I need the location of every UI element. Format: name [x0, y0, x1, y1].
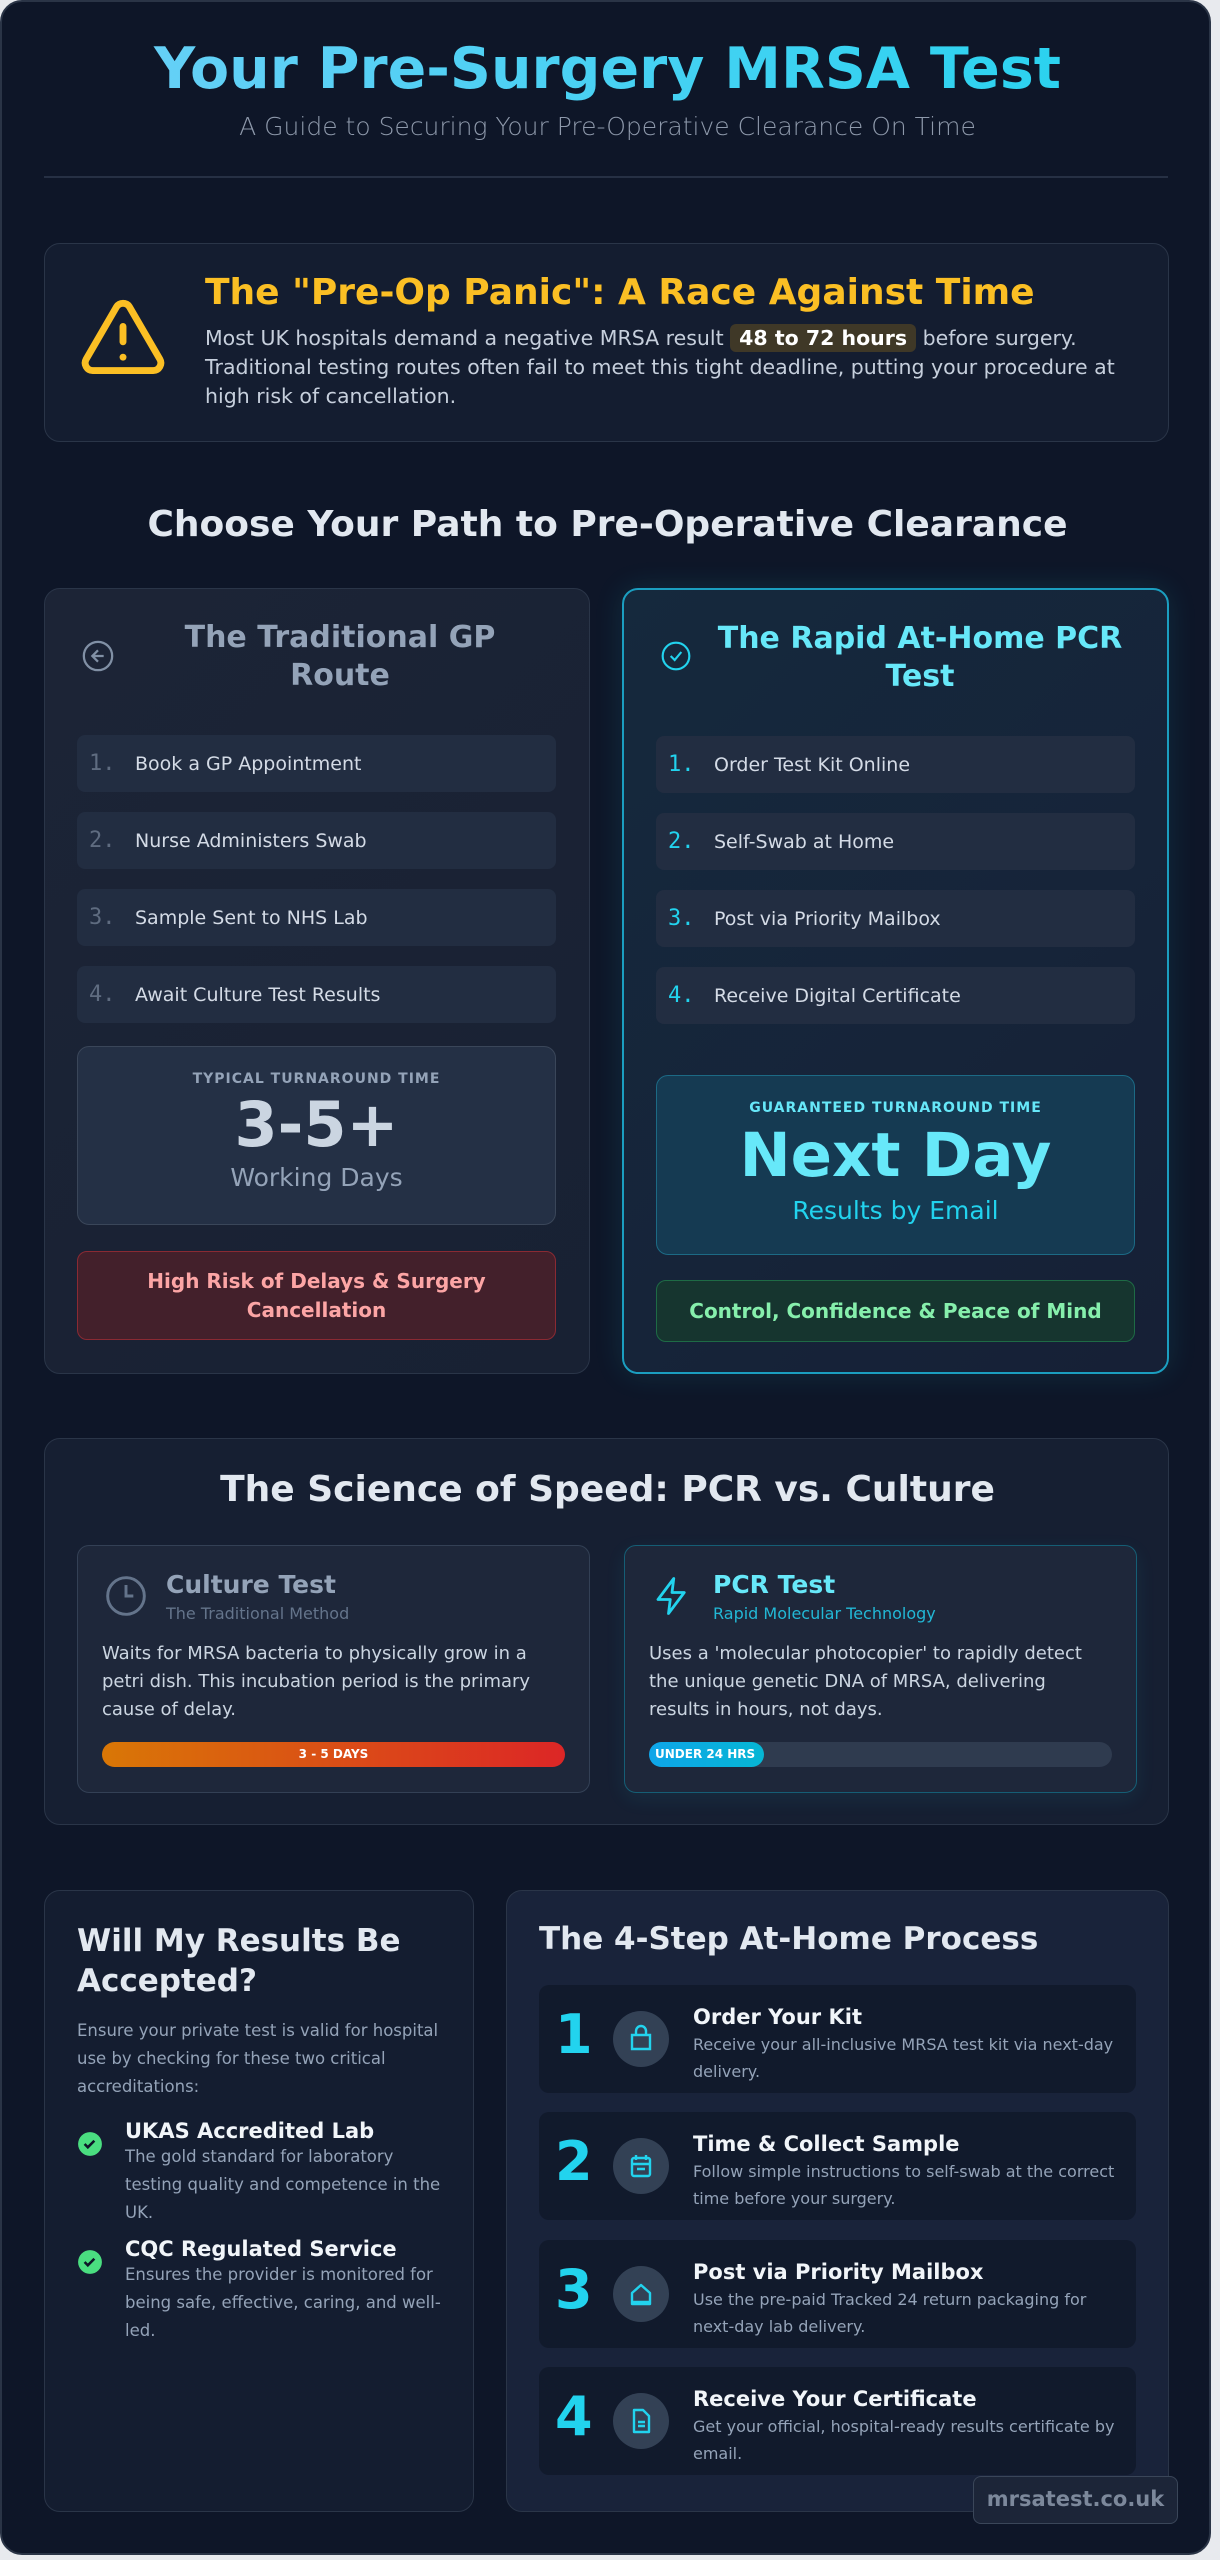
- text: panic body: Most UK hospitals demand a negative MRSA result 48 to 72 hours before surgery. Traditional testing routes often fail to meet this tight deadline, putting your procedure at high risk of cancellation.: [205, 326, 1115, 408]
- card: PCR test: [624, 1545, 1137, 1793]
- stat: next day: [656, 1075, 1135, 1255]
- item: CQC: CQC Regulated Service: [125, 2237, 397, 2261]
- step 1: Receive your all-inclusive MRSA test kit via next-day delivery.: [693, 2035, 1113, 2081]
- icon: clock: [106, 1576, 146, 1616]
- watermark: [973, 2476, 1178, 2524]
- steps list: [77, 735, 556, 1023]
- panel: accreditation: [44, 1890, 474, 2512]
- heading: Will My Results Be Accepted?: [77, 1923, 400, 1999]
- step 1: Order Your Kit: [693, 2005, 862, 2029]
- steps list: Self-Swab at Home: [714, 830, 894, 852]
- steps list: Post via Priority Mailbox: [714, 908, 941, 930]
- steps list: Book a GP Appointment: [135, 752, 361, 774]
- steps list: 1.: [668, 752, 694, 777]
- step 4: Receive Your Certificate: [693, 2387, 977, 2411]
- card: PCR test: PCR Test: [713, 1570, 835, 1599]
- step 4: Get your official, hospital-ready results certificate by email.: [693, 2417, 1114, 2463]
- step 3: Use the pre-paid Tracked 24 return packaging for next-day lab delivery.: [693, 2290, 1086, 2336]
- icon: check circle: [662, 642, 690, 670]
- step 3: [539, 2240, 1136, 2348]
- panel: pre-op panic: [44, 243, 1169, 442]
- heading: choose path: Choose Your Path to Pre-Operative Clearance: [147, 504, 1068, 545]
- intro text: Ensure your private test is valid for hospital use by checking for these two critical accreditations:: [77, 2021, 438, 2096]
- callout: high risk: High Risk of Delays & Surgery: [147, 1269, 486, 1293]
- stat: 3-5+ days: TYPICAL TURNAROUND TIME: [193, 1071, 440, 1087]
- heading: The 4-Step At-Home Process: [539, 1921, 1038, 1957]
- item: UKAS: [78, 2119, 440, 2222]
- panel: 4-step process: [506, 1890, 1169, 2512]
- step 3: Post via Priority Mailbox: [693, 2260, 983, 2284]
- icon: lightning: [656, 1577, 686, 1615]
- stat: 3-5+ days: Working Days: [230, 1163, 403, 1192]
- steps list: 4.: [668, 983, 694, 1008]
- steps list: Await Culture Test Results: [135, 984, 380, 1006]
- heading: The Rapid At-Home PCR Test: [718, 621, 1122, 694]
- icon: back arrow: [82, 640, 114, 672]
- bar: under 24 hrs: [649, 1742, 1112, 1767]
- stat: next day: Next Day: [740, 1120, 1051, 1191]
- stat: next day: Results by Email: [792, 1196, 999, 1225]
- heading: The Traditional GP Route: [185, 620, 495, 693]
- steps list: 3.: [89, 905, 116, 930]
- watermark: mrsatest.co.uk: [987, 2487, 1164, 2511]
- panel: rapid PCR: [622, 588, 1169, 1374]
- callout: high risk: [77, 1251, 556, 1340]
- step 2: Time & Collect Sample: [693, 2132, 960, 2156]
- card: PCR test: Uses a 'molecular photocopier' to rapidly detect the unique genetic DNA of MRSA, delivering results in hours, not days.: [649, 1643, 1082, 1720]
- steps list: 4.: [89, 982, 116, 1007]
- steps list: 3.: [668, 906, 694, 931]
- panel: traditional GP route: [44, 588, 590, 1374]
- step 1: [539, 1985, 1136, 2093]
- callout: peace of mind: Control, Confidence & Peace of Mind: [689, 1299, 1102, 1323]
- stat: next day: GUARANTEED TURNAROUND TIME: [749, 1100, 1042, 1116]
- item: CQC: Ensures the provider is monitored for being safe, effective, caring, and well-led.: [125, 2265, 441, 2340]
- card: culture test: Waits for MRSA bacteria to physically grow in a petri dish. This incubation period is the primary cause of delay.: [102, 1643, 530, 1720]
- step 1: 1: [555, 2003, 593, 2066]
- bar: 3-5 days: [102, 1742, 565, 1767]
- step 2: [539, 2112, 1136, 2220]
- card: culture test: The Traditional Method: [166, 1604, 349, 1623]
- step 2: 2: [555, 2130, 593, 2193]
- icon: warning: [82, 300, 164, 374]
- callout: peace of mind: [656, 1280, 1135, 1342]
- step 4: [539, 2367, 1136, 2475]
- bar: 3-5 days: 3 - 5 DAYS: [299, 1747, 368, 1761]
- callout: high risk: Cancellation: [247, 1298, 386, 1322]
- step 2: Follow simple instructions to self-swab at the correct time before your surgery.: [693, 2162, 1114, 2208]
- stat: 3-5+ days: [77, 1046, 556, 1225]
- heading: The Science of Speed: PCR vs. Culture: [220, 1469, 995, 1510]
- stat: 3-5+ days: 3-5+: [235, 1088, 398, 1161]
- steps list: Nurse Administers Swab: [135, 830, 367, 852]
- card: culture test: [77, 1545, 590, 1793]
- card: PCR test: Rapid Molecular Technology: [713, 1604, 936, 1623]
- heading: panic: The "Pre-Op Panic": A Race Against Time: [205, 272, 1035, 313]
- steps list: 1.: [89, 751, 116, 776]
- panel: science of speed: [44, 1438, 1169, 1825]
- item: UKAS: The gold standard for laboratory testing quality and competence in the UK.: [125, 2147, 440, 2222]
- steps list: 2.: [668, 829, 694, 854]
- item: CQC: [78, 2237, 441, 2340]
- subtitle: A Guide to Securing Your Pre-Operative Clearance On Time: [239, 112, 976, 141]
- step 4: 4: [555, 2385, 593, 2448]
- steps list: 2.: [89, 828, 116, 853]
- steps list: [656, 736, 1135, 1024]
- card: culture test: Culture Test: [166, 1570, 336, 1599]
- steps list: Order Test Kit Online: [714, 754, 910, 776]
- steps list: Sample Sent to NHS Lab: [135, 906, 368, 928]
- title: Your Pre-Surgery MRSA Test: [154, 36, 1061, 102]
- step 3: 3: [555, 2258, 593, 2321]
- item: UKAS: UKAS Accredited Lab: [125, 2119, 374, 2143]
- steps list: Receive Digital Certificate: [714, 984, 961, 1006]
- bar: under 24 hrs: UNDER 24 HRS: [655, 1747, 755, 1761]
